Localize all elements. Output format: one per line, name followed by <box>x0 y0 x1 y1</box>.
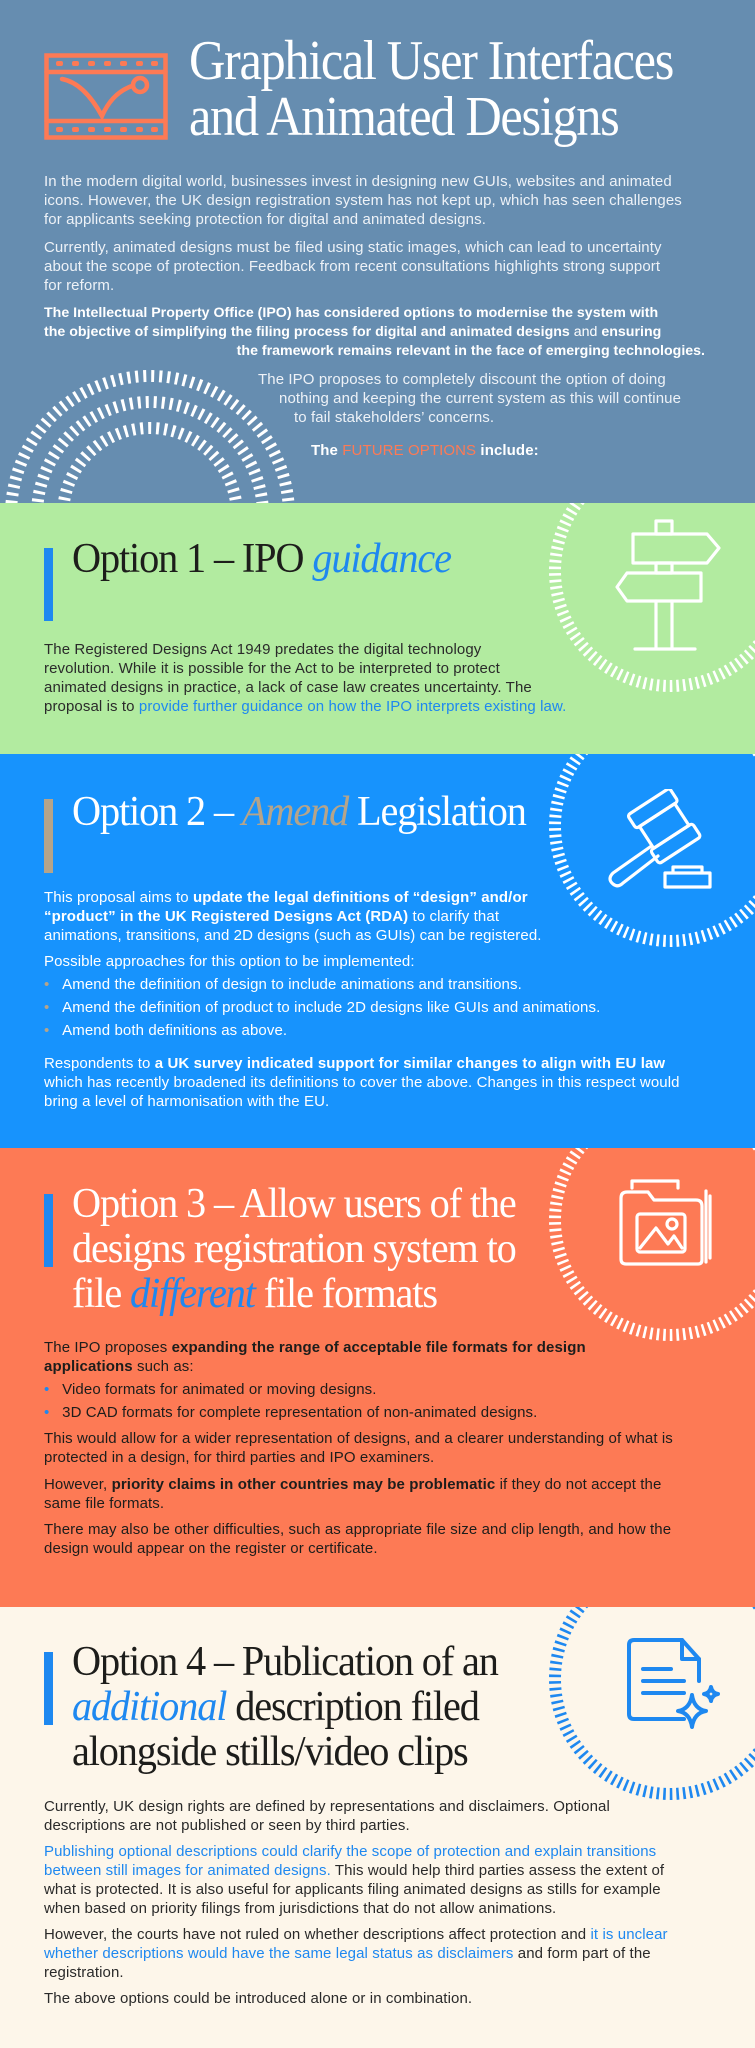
closing paragraph: which has recently broadened its definitions to cover the above. Changes in this respect would <box>44 1074 680 1091</box>
paragraph difficulties: design would appear on the register or certificate. <box>44 1540 378 1557</box>
intro paragraph 2: about the scope of protection. Feedback from recent consultations highlights strong support <box>44 258 660 275</box>
intro paragraph 1: In the modern digital world, businesses invest in designing new GUIs, websites and animated <box>44 173 672 190</box>
intro paragraph 1 <box>44 173 682 228</box>
future options lead-in: The FUTURE OPTIONS include: <box>311 442 539 459</box>
paragraph courts: whether descriptions would have the same legal status as disclaimers and form part of the <box>44 1945 651 1962</box>
body text: animated designs in practice, a lack of case law creates uncertainty. The <box>44 679 532 696</box>
body intro: This proposal aims to update the legal definitions of “design” and/or <box>44 889 528 906</box>
body intro: “product” in the UK Registered Designs Act (RDA) to clarify that <box>44 908 499 925</box>
heading bar <box>44 1194 53 1267</box>
paragraph publishing: what is protected. It is also useful for applicants filing animated designs as stills for example <box>44 1881 661 1898</box>
bullet list: • Amend the definition of product to include 2D designs like GUIs and animations. <box>44 999 600 1016</box>
paragraph priority claims <box>44 1476 661 1512</box>
discount note: nothing and keeping the current system as this will continue <box>279 390 681 407</box>
paragraph courts <box>44 1926 668 1981</box>
paragraph wider representation: protected in a design, for third parties and IPO examiners. <box>44 1449 434 1466</box>
heading: Option 1 – IPO guidance <box>72 536 451 582</box>
heading: alongside stills/video clips <box>72 1729 468 1775</box>
closing paragraph: bring a level of harmonisation with the EU. <box>44 1093 329 1110</box>
bullet list: • Amend the definition of design to include animations and transitions. <box>44 976 522 993</box>
discount note: The IPO proposes to completely discount the option of doing <box>258 371 666 388</box>
paragraph wider representation <box>44 1430 673 1466</box>
header panel <box>0 0 755 503</box>
closing paragraph: Respondents to a UK survey indicated support for similar changes to align with EU law <box>44 1055 665 1072</box>
intro paragraph 3 bold: The Intellectual Property Office (IPO) has considered options to modernise the system with <box>44 305 658 321</box>
intro paragraph 2: Currently, animated designs must be filed using static images, which can lead to uncertainty <box>44 239 662 256</box>
discount note: to fail stakeholders’ concerns. <box>294 409 494 426</box>
body intro <box>44 889 542 944</box>
bullet list <box>44 976 600 1039</box>
intro paragraph 1: for applicants seeking protection for digital and animated designs. <box>44 211 486 228</box>
discount note <box>258 371 681 426</box>
body intro: animations, transitions, and 2D designs (such as GUIs) can be registered. <box>44 927 542 944</box>
decorative ring <box>549 503 755 692</box>
paragraph publishing <box>44 1843 664 1917</box>
paragraph difficulties <box>44 1521 671 1557</box>
paragraph wider representation: This would allow for a wider representation of designs, and a clearer understanding of what is <box>44 1430 673 1447</box>
intro paragraph 3 bold <box>44 305 661 340</box>
body text: revolution. While it is possible for the Act to be interpreted to protect <box>44 660 500 677</box>
paragraph courts: However, the courts have not ruled on whether descriptions affect protection and it is unclear <box>44 1926 668 1943</box>
icon: gavel <box>608 789 712 889</box>
body intro: applications such as: <box>44 1358 194 1375</box>
paragraph courts: registration. <box>44 1964 124 1981</box>
paragraph currently <box>44 1798 610 1834</box>
bullet list: • 3D CAD formats for complete representation of non-animated designs. <box>44 1404 537 1421</box>
intro paragraph 3 bold: the objective of simplifying the filing process for digital and animated designs and ensuring <box>44 324 661 340</box>
heading: designs registration system to <box>72 1226 516 1272</box>
bullet list <box>44 1381 537 1421</box>
decorative ring <box>549 754 755 947</box>
decorative dashed arcs <box>6 370 294 503</box>
body intro: The IPO proposes expanding the range of acceptable file formats for design <box>44 1339 586 1356</box>
paragraph publishing: between still images for animated designs. This would help third parties assess the extent of <box>44 1862 664 1879</box>
panel: option 1 <box>0 503 755 754</box>
icon: film strip animation <box>44 53 168 140</box>
panel: option 2 <box>0 754 755 1148</box>
paragraph priority claims: same file formats. <box>44 1495 164 1512</box>
icon: document with sparkle <box>627 1638 720 1729</box>
panel: option 4 <box>0 1607 755 2048</box>
heading: Option 2 – Amend Legislation <box>72 789 526 835</box>
body intro <box>44 1339 586 1375</box>
paragraph currently: Currently, UK design rights are defined by representations and disclaimers. Optional <box>44 1798 610 1815</box>
heading: Option 3 – Allow users of the <box>72 1181 516 1227</box>
paragraph priority claims: However, priority claims in other countries may be problematic if they do not accept the <box>44 1476 661 1493</box>
paragraph difficulties: There may also be other difficulties, such as appropriate file size and clip length, and how the <box>44 1521 671 1538</box>
body text <box>44 641 566 715</box>
closing note: The above options could be introduced alone or in combination. <box>44 1990 472 2007</box>
intro paragraph 2 <box>44 239 662 294</box>
header panel: the framework remains relevant in the face of emerging technologies. <box>237 343 705 359</box>
bullet list: • Amend both definitions as above. <box>44 1022 287 1039</box>
intro paragraph 1: icons. However, the UK design registration system has not kept up, which has seen challenges <box>44 192 682 209</box>
heading: file different file formats <box>72 1271 437 1317</box>
decorative ring <box>549 1148 755 1341</box>
closing paragraph <box>44 1055 680 1110</box>
icon: signpost <box>615 519 721 651</box>
body text: The Registered Designs Act 1949 predates the digital technology <box>44 641 481 658</box>
heading <box>72 1639 498 1775</box>
title: and Animated Designs <box>189 86 618 148</box>
heading bar <box>44 1652 53 1725</box>
heading bar <box>44 799 53 873</box>
decorative ring <box>549 1607 755 1800</box>
approaches lead: Possible approaches for this option to be implemented: <box>44 953 415 970</box>
title <box>189 30 673 148</box>
body text: proposal is to provide further guidance on how the IPO interprets existing law. <box>44 698 566 715</box>
paragraph currently: descriptions are not published or seen by third parties. <box>44 1817 410 1834</box>
heading: additional description filed <box>72 1684 479 1730</box>
intro paragraph 2: for reform. <box>44 277 114 294</box>
icon: image folder <box>619 1179 712 1266</box>
panel: option 3 <box>0 1148 755 1607</box>
paragraph publishing: Publishing optional descriptions could clarify the scope of protection and explain transitions <box>44 1843 656 1860</box>
title: Graphical User Interfaces <box>189 30 673 92</box>
heading <box>72 1181 516 1317</box>
heading bar <box>44 548 53 621</box>
heading: Option 4 – Publication of an <box>72 1639 498 1685</box>
paragraph publishing: when based on priority filings from jurisdictions that do not allow animations. <box>44 1900 556 1917</box>
bullet list: • Video formats for animated or moving designs. <box>44 1381 377 1398</box>
